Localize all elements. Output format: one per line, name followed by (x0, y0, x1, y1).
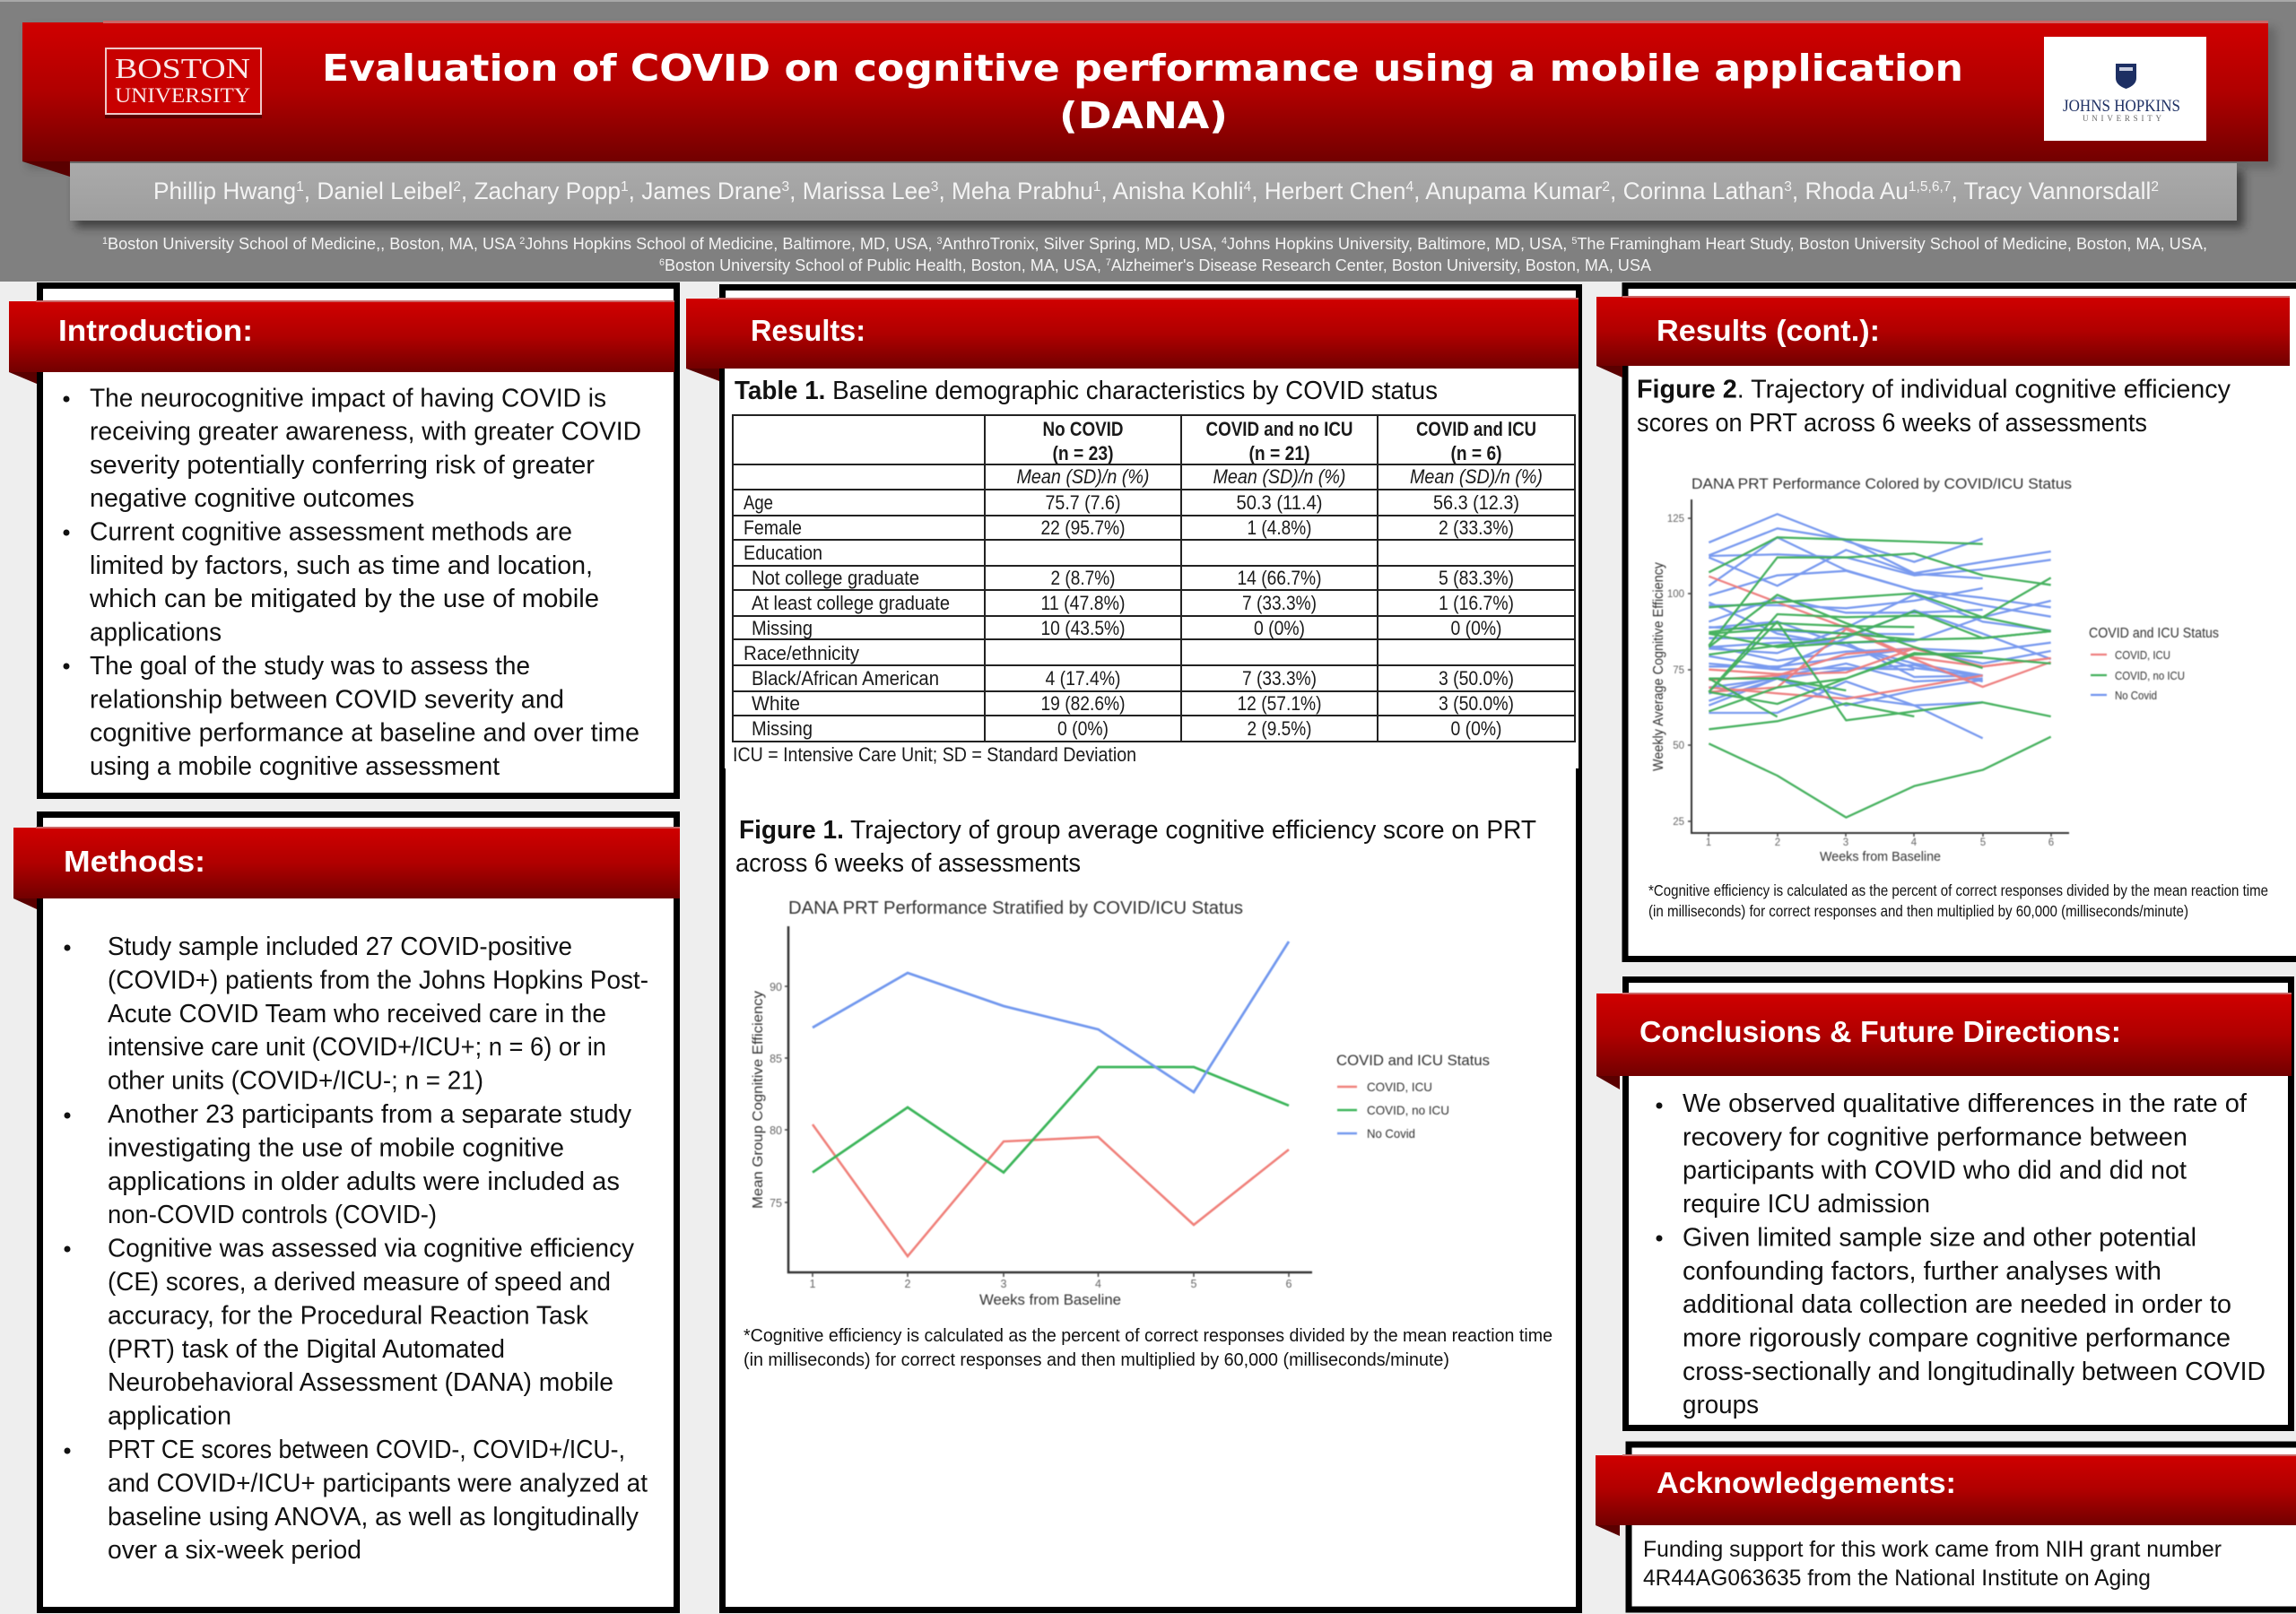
authors bar: Phillip Hwang (153, 178, 300, 204)
table 1: baseline demographics: (n = 21) (1248, 442, 1309, 464)
table 1: baseline demographics: 0 (0%) (1451, 717, 1501, 740)
panel: results continued (1596, 285, 2296, 959)
line chart: figure 1 group averages: 80 (770, 1124, 782, 1137)
line chart: figure 1 group averages (751, 898, 1490, 1308)
heading: acknowledgements: Acknowledgements: (1657, 1467, 1956, 1500)
panel: results (686, 287, 1578, 1610)
text: methods bullet 3: (PRT) task of the Digital Automated (108, 1335, 505, 1364)
table 1: baseline demographics: 7 (33.3%) (1242, 667, 1317, 690)
affiliations: Johns Hopkins University, Baltimore, MD, USA, (1227, 234, 1571, 253)
text: methods bullet 1 (65, 933, 648, 1096)
table 1: baseline demographics: Mean (SD)/n (%) (1017, 465, 1150, 488)
authors bar: , James Drane (629, 178, 781, 204)
line chart: figure 1 group averages: Mean Group Cognitive Efficiency (751, 991, 766, 1209)
table 1: baseline demographics: 4 (17.4%) (1046, 667, 1121, 690)
affiliations: Boston University School of Public Health, Boston, MA, USA, (665, 256, 1106, 274)
affiliations: 4 (1222, 236, 1227, 247)
figure 1 caption: Figure 1. Trajectory of group average cognitive efficiency score on PRT (739, 816, 1536, 845)
line chart: figure 2 individual trajectories: 125 (1667, 514, 1684, 525)
logo: Johns Hopkins University (2044, 37, 2206, 141)
line chart: figure 1 group averages: 85 (770, 1053, 782, 1065)
text: introduction bullet 2: Current cognitive assessment methods are (90, 518, 572, 547)
heading: introduction: Introduction: (58, 315, 253, 348)
table 1: baseline demographics: 3 (50.0%) (1439, 667, 1514, 690)
table 1: baseline demographics (733, 415, 1575, 742)
line chart: figure 1 group averages: 4 (1095, 1278, 1101, 1290)
line chart: figure 1 group averages: 1 (810, 1278, 816, 1290)
text: methods bullet 1: intensive care unit (COVID+/ICU+; n = 6) or in (108, 1033, 606, 1062)
table 1 caption: Table 1. Baseline demographic characteristics by COVID status (735, 377, 1438, 405)
text: methods bullet 3: Neurobehavioral Assessment (DANA) mobile (108, 1368, 613, 1397)
text: methods bullet 2: non-COVID controls (COVID-) (108, 1201, 437, 1229)
line chart: figure 2 individual trajectories (1651, 475, 2219, 864)
table 1: baseline demographics: 2 (8.7%) (1051, 567, 1116, 589)
line chart: figure 2 individual trajectories: 4 (1911, 837, 1918, 848)
text: methods bullet 4: and COVID+/ICU+ participants were analyzed at (108, 1469, 648, 1497)
table 1: baseline demographics: 10 (43.5%) (1040, 617, 1125, 639)
affiliations (102, 234, 2207, 274)
text: methods bullet 1: (COVID+) patients from the Johns Hopkins Post- (108, 966, 648, 994)
table 1: baseline demographics: Mean (SD)/n (%) (1410, 465, 1543, 488)
line chart: figure 2 individual trajectories: 6 (2048, 837, 2054, 848)
authors bar: 3 (1784, 179, 1792, 195)
line chart: figure 1 group averages: 90 (770, 981, 782, 994)
table 1: baseline demographics: COVID and ICU (1416, 418, 1536, 440)
table 1: baseline demographics: 7 (33.3%) (1242, 592, 1317, 614)
text: conclusions bullet 1: participants with COVID who did and did not (1683, 1157, 2187, 1185)
panel: conclusions and future directions (1596, 979, 2292, 1427)
figure 2 footnote: (in milliseconds) for correct responses and then multiplied by 60,000 (milliseconds/minute) (1648, 902, 2188, 920)
table 1: baseline demographics: 22 (95.7%) (1040, 516, 1125, 539)
text: introduction bullet 2 (63, 518, 599, 647)
authors bar (70, 163, 2237, 221)
legend: figure 1: COVID, ICU (1367, 1080, 1432, 1094)
title: (DANA) (1059, 94, 1228, 137)
text: methods bullet 4: baseline using ANOVA, as well as longitudinally (108, 1503, 639, 1532)
title: Evaluation of COVID on cognitive performance using a mobile application (322, 47, 1963, 90)
text: introduction bullet 2: which can be mitigated by the use of mobile (89, 585, 599, 613)
legend: figure 2: COVID, no ICU (2115, 670, 2185, 682)
authors bar: 3 (931, 179, 939, 195)
text: introduction bullet 2: limited by factors, such as time and location, (90, 551, 593, 580)
figure 1 footnote: (in milliseconds) for correct responses and then multiplied by 60,000 (milliseconds/minute) (744, 1350, 1449, 1370)
text: methods bullet 1: Acute COVID Team who received care in the (108, 1000, 606, 1028)
table 1: baseline demographics: 50.3 (11.4) (1236, 491, 1322, 514)
authors bar: 2 (2151, 179, 2159, 195)
table 1: baseline demographics: 75.7 (7.6) (1046, 491, 1121, 514)
text: conclusions bullet 2: groups (1683, 1391, 1759, 1419)
line chart: figure 2 individual trajectories: 5 (1980, 837, 1986, 848)
text: introduction bullet 3: The goal of the study was to assess the (90, 652, 530, 681)
figure 1 caption: across 6 weeks of assessments (735, 849, 1081, 878)
text: methods bullet 4: PRT CE scores between COVID-, COVID+/ICU-, (108, 1436, 625, 1464)
affiliations: Johns Hopkins School of Medicine, Baltimore, MD, USA, (525, 234, 937, 253)
text: conclusions bullet 2: confounding factors, further analyses with (1683, 1257, 2161, 1286)
logo: Johns Hopkins University: JOHNS HOPKINS (2063, 97, 2180, 116)
figure 1 footnote (744, 1326, 1552, 1370)
table 1: baseline demographics: Age (744, 491, 773, 514)
figure 2 caption (1637, 375, 2231, 438)
legend: figure 1: COVID and ICU Status (1336, 1052, 1490, 1069)
text: methods bullet 3: application (108, 1402, 231, 1431)
text: conclusions bullet 2: more rigorously compare cognitive performance (1683, 1323, 2231, 1352)
table 1: baseline demographics: At least college graduate (752, 592, 950, 614)
table 1: baseline demographics: 11 (47.8%) (1040, 592, 1125, 614)
line chart: figure 1 group averages: DANA PRT Performance Stratified by COVID/ICU Status (788, 898, 1243, 918)
heading: conclusions: Conclusions & Future Directions: (1639, 1016, 2121, 1049)
affiliations: 6 (659, 257, 665, 268)
line chart: figure 2 individual trajectories: 50 (1673, 741, 1684, 751)
text: introduction bullet 1: The neurocognitive impact of having COVID is (90, 384, 606, 412)
affiliations: 3 (937, 236, 943, 247)
text: introduction bullet 1: negative cognitive outcomes (90, 484, 414, 513)
authors bar: , Rhoda Au (1792, 178, 1909, 204)
text: methods bullet 1: Study sample included 27 COVID-positive (108, 933, 572, 961)
line chart: figure 1 group averages: 2 (905, 1278, 911, 1290)
legend: figure 2: No Covid (2115, 690, 2157, 702)
authors bar: , Corinna Lathan (1610, 178, 1784, 204)
line chart: figure 2 individual trajectories: DANA PRT Performance Colored by COVID/ICU Status (1692, 475, 2072, 492)
title (322, 47, 1963, 137)
table 1: baseline demographics: 5 (83.3%) (1439, 567, 1514, 589)
affiliations: Alzheimer's Disease Research Center, Boston University, Boston, MA, USA (1111, 256, 1652, 274)
heading: methods: Methods: (64, 846, 205, 879)
heading: introduction (9, 300, 674, 384)
table 1: baseline demographics: White (752, 692, 800, 715)
authors bar: , Daniel Leibel (304, 178, 453, 204)
table 1: baseline demographics: 0 (0%) (1057, 717, 1109, 740)
text: conclusions bullet 2: Given limited sample size and other potential (1683, 1223, 2196, 1252)
legend: figure 1 (1336, 1052, 1490, 1141)
text: methods bullet 3: accuracy, for the Procedural Reaction Task (108, 1301, 589, 1330)
table 1: baseline demographics: Missing (752, 717, 813, 740)
table 1: baseline demographics: 19 (82.6%) (1040, 692, 1125, 715)
text: methods bullet 2: Another 23 participants from a separate study (108, 1100, 632, 1129)
table 1: baseline demographics: 1 (16.7%) (1439, 592, 1514, 614)
legend: figure 2 (2089, 626, 2219, 702)
panel: acknowledgements (1596, 1445, 2296, 1610)
table 1: baseline demographics: (n = 23) (1053, 442, 1114, 464)
text: funding statement: Funding support for this work came from NIH grant number (1643, 1537, 2222, 1562)
authors bar: , Meha Prabhu (938, 178, 1093, 204)
text: methods bullet 2: investigating the use of mobile cognitive (108, 1133, 564, 1162)
table 1: baseline demographics: 0 (0%) (1451, 617, 1501, 639)
authors bar: 1 (1093, 179, 1100, 195)
affiliations: AnthroTronix, Silver Spring, MD, USA, (943, 234, 1222, 253)
affiliations: Boston University School of Medicine,, Boston, MA, USA (108, 234, 519, 253)
table 1: baseline demographics: Black/African American (752, 667, 939, 690)
heading: results: Results: (751, 315, 865, 348)
text: methods bullet 2 (65, 1100, 632, 1229)
text: methods bullet 3 (65, 1235, 635, 1431)
text: introduction bullet 3: cognitive performance at baseline and over time (90, 719, 639, 748)
table 1: baseline demographics: 2 (9.5%) (1247, 717, 1311, 740)
text: methods bullet 3: Cognitive was assessed via cognitive efficiency (108, 1235, 635, 1263)
text: methods bullet 4: over a six-week period (108, 1536, 361, 1565)
table image background (725, 369, 1578, 768)
line chart: figure 2 individual trajectories: 1 (1706, 837, 1711, 848)
figure 1 footnote: *Cognitive efficiency is calculated as the percent of correct responses divided by the mean reaction time (744, 1326, 1552, 1346)
table 1: baseline demographics: Missing (752, 617, 813, 639)
table 1: baseline demographics: 0 (0%) (1254, 617, 1305, 639)
text: conclusions bullet 1 (1656, 1089, 2247, 1219)
affiliations: 1 (102, 236, 108, 247)
authors bar: , Herbert Chen (1251, 178, 1405, 204)
authors bar: 4 (1244, 179, 1251, 195)
line chart: figure 2 individual trajectories: 75 (1673, 665, 1684, 676)
table 1: baseline demographics: No COVID (1042, 418, 1123, 440)
heading: conclusions (1596, 993, 2292, 1089)
affiliations: The Framingham Heart Study, Boston University School of Medicine, Boston, MA, USA, (1577, 234, 2207, 253)
text: methods bullet 3: (CE) scores, a derived measure of speed and (108, 1268, 611, 1297)
text: introduction bullet 1: receiving greater awareness, with greater COVID (90, 418, 641, 447)
table 1 footnote: ICU = Intensive Care Unit; SD = Standard Deviation (733, 743, 1136, 766)
text: funding statement: 4R44AG063635 from the National Institute on Aging (1643, 1566, 2151, 1591)
authors bar: 4 (1405, 179, 1413, 195)
text: conclusions bullet 1: require ICU admission (1683, 1190, 1930, 1219)
text: introduction bullet 3 (63, 652, 639, 781)
text: introduction bullet 1 (63, 384, 641, 513)
line chart: figure 1 group averages: 6 (1286, 1278, 1292, 1290)
text: introduction bullet 3: relationship between COVID severity and (90, 685, 564, 714)
legend: figure 2: COVID and ICU Status (2089, 626, 2219, 641)
authors bar: 1 (621, 179, 629, 195)
figure 2 footnote (1648, 881, 2268, 920)
table 1: baseline demographics: Mean (SD)/n (%) (1213, 465, 1345, 488)
table 1: baseline demographics: Education (744, 542, 822, 564)
authors bar: 2 (453, 179, 461, 195)
text: introduction bullet 3: using a mobile cognitive assessment (90, 752, 500, 781)
table 1: baseline demographics: 14 (66.7%) (1238, 567, 1322, 589)
figure 2 caption: scores on PRT across 6 weeks of assessments (1637, 409, 2147, 438)
authors bar: , Marissa Lee (789, 178, 931, 204)
text: methods bullet 4 (65, 1436, 648, 1565)
table 1: baseline demographics: Female (744, 516, 802, 539)
text: conclusions bullet 2: cross-sectionally and longitudinally between COVID (1683, 1358, 2266, 1386)
table 1: baseline demographics: 56.3 (12.3) (1433, 491, 1519, 514)
authors bar: 2 (1602, 179, 1610, 195)
text: methods bullet 1: other units (COVID+/ICU-; n = 21) (108, 1067, 483, 1096)
authors bar: , Anupama Kumar (1413, 178, 1602, 204)
table 1: baseline demographics: 3 (50.0%) (1439, 692, 1514, 715)
authors bar: 1,5,6,7 (1909, 179, 1952, 195)
heading: results continued: Results (cont.): (1657, 315, 1880, 348)
authors bar: 3 (781, 179, 789, 195)
affiliations: 2 (519, 236, 525, 247)
line chart: figure 1 group averages: 5 (1191, 1278, 1197, 1290)
heading: results continued (1596, 296, 2290, 377)
affiliations: 5 (1571, 236, 1577, 247)
table 1: baseline demographics: Not college graduate (752, 567, 919, 589)
heading: results (686, 298, 1578, 381)
affiliations: 7 (1106, 257, 1111, 268)
line chart: figure 1 group averages: 3 (1001, 1278, 1007, 1290)
legend: figure 1: No Covid (1367, 1126, 1415, 1141)
line chart: figure 2 individual trajectories: 3 (1843, 837, 1848, 848)
table 1: baseline demographics: (n = 6) (1451, 442, 1501, 464)
line chart: figure 1 group averages: Weeks from Baseline (979, 1291, 1121, 1308)
authors bar: , Anisha Kohli (1100, 178, 1244, 204)
table 1: baseline demographics: COVID and no ICU (1205, 418, 1352, 440)
legend: figure 2: COVID, ICU (2115, 649, 2170, 662)
logo: Johns Hopkins University: UNIVERSITY (2083, 114, 2161, 123)
figure 2 caption: Figure 2. Trajectory of individual cognitive efficiency (1637, 375, 2231, 404)
line chart: figure 2 individual trajectories: 25 (1673, 817, 1684, 828)
panel: introduction (9, 285, 676, 796)
table 1: baseline demographics: Race/ethnicity (744, 642, 859, 664)
title banner (22, 21, 2268, 177)
text: methods bullet 2: applications in older adults were included as (108, 1167, 620, 1196)
authors bar: , Tracy Vannorsdall (1951, 178, 2151, 204)
text: conclusions bullet 1: We observed qualitative differences in the rate of (1683, 1089, 2247, 1118)
panel: methods (13, 814, 680, 1610)
text: introduction bullet 2: applications (90, 619, 222, 647)
text: conclusions bullet 2 (1656, 1223, 2266, 1419)
logo: Boston University: BOSTON (115, 52, 250, 84)
text: introduction bullet 1: severity potentially conferring risk of greater (90, 451, 596, 480)
heading: acknowledgements (1596, 1454, 2296, 1536)
line chart: figure 2 individual trajectories: Weeks from Baseline (1820, 849, 1941, 864)
authors bar: 1 (296, 179, 304, 195)
legend: figure 1: COVID, no ICU (1367, 1103, 1449, 1117)
logo: Boston University (105, 48, 262, 118)
table 1: baseline demographics: 2 (33.3%) (1439, 516, 1514, 539)
logo: Boston University: UNIVERSITY (115, 84, 250, 107)
header band (0, 0, 2296, 282)
line chart: figure 2 individual trajectories: 2 (1775, 837, 1780, 848)
text: funding statement (1643, 1537, 2222, 1591)
table 1: baseline demographics: 1 (4.8%) (1247, 516, 1311, 539)
heading: methods (13, 827, 680, 909)
table 1: baseline demographics: 12 (57.1%) (1238, 692, 1322, 715)
line chart: figure 2 individual trajectories: 100 (1667, 589, 1684, 600)
line chart: figure 1 group averages: 75 (770, 1197, 782, 1210)
figure 1 caption (735, 816, 1536, 878)
line chart: figure 2 individual trajectories: Weekly Average Cognitive Efficiency (1651, 562, 1666, 771)
text: conclusions bullet 1: recovery for cognitive performance between (1683, 1123, 2187, 1151)
authors bar: , Zachary Popp (461, 178, 621, 204)
text: conclusions bullet 2: additional data collection are needed in order to (1683, 1290, 2231, 1319)
